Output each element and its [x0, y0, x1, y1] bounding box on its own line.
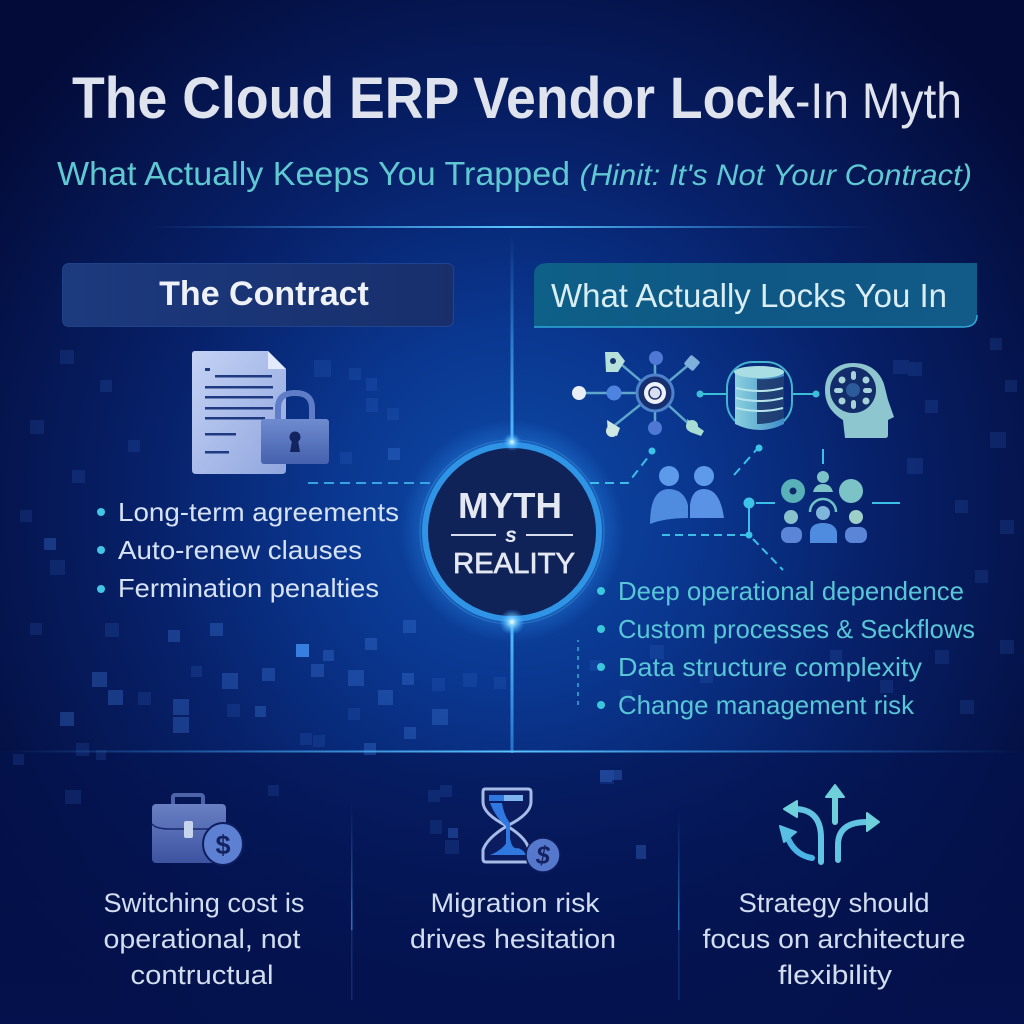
icon: hub network — [572, 351, 704, 437]
panel header: The Contract: The Contract — [159, 275, 369, 313]
callout: migration risk: drives hesitation — [410, 924, 616, 954]
callout: switching cost — [104, 888, 304, 990]
icon: team group — [781, 471, 867, 543]
left bullet list: Auto-renew clauses — [118, 535, 362, 565]
icon: diverging strategy arrows — [780, 785, 879, 862]
icon: contract document with padlock — [192, 351, 329, 474]
left bullet list: Long-term agreements — [118, 497, 399, 527]
callout: switching cost: contructual — [130, 960, 274, 990]
left bullet list: Fermination penalties — [118, 573, 379, 603]
icon: head with gear brain — [825, 363, 894, 438]
circular badge: myth vs reality: s — [505, 524, 517, 547]
icon: briefcase with dollar coin: $ — [215, 830, 231, 860]
right bullet list: Data structure complexity — [618, 652, 922, 682]
right bullet list: Custom processes & Seckflows — [618, 614, 975, 644]
right bullet list — [597, 576, 975, 720]
panel header: What Actually Locks You In: What Actually Locks You In — [551, 277, 947, 314]
callout: migration risk — [410, 888, 616, 954]
callout: switching cost: operational, not — [104, 924, 301, 954]
title: The Cloud ERP Vendor Lock-In Myth — [72, 66, 962, 131]
icon: database — [696, 362, 820, 430]
circular badge: myth vs reality: REALITY — [453, 548, 575, 580]
callout: strategy: flexibility — [778, 960, 893, 990]
central vertical connector — [510, 235, 514, 753]
circular badge: myth vs reality: MYTH — [458, 485, 562, 526]
panel header: What Actually Locks You In — [534, 263, 977, 327]
right bullet list: Change management risk — [618, 690, 915, 720]
right bullet list: Deep operational dependence — [618, 576, 964, 606]
dashed connectors right — [578, 448, 900, 705]
icon: hourglass with coin: $ — [535, 842, 551, 870]
callout: switching cost: Switching cost is — [104, 888, 304, 918]
icon: briefcase with dollar coin — [152, 795, 243, 865]
callout: migration risk: Migration risk — [430, 888, 600, 918]
icon: hourglass with coin — [483, 789, 560, 872]
dashed connector left — [308, 482, 436, 484]
callout: strategy — [702, 888, 966, 990]
subtitle: What Actually Keeps You Trapped (Hinit: It's Not Your Contract) — [57, 155, 972, 192]
panel header: The Contract — [62, 264, 454, 326]
callout: strategy: Strategy should — [738, 888, 930, 918]
callout: strategy: focus on architecture — [702, 924, 966, 954]
icon: two people — [650, 466, 724, 524]
left bullet list — [97, 497, 399, 603]
circular badge: myth vs reality — [400, 419, 624, 643]
